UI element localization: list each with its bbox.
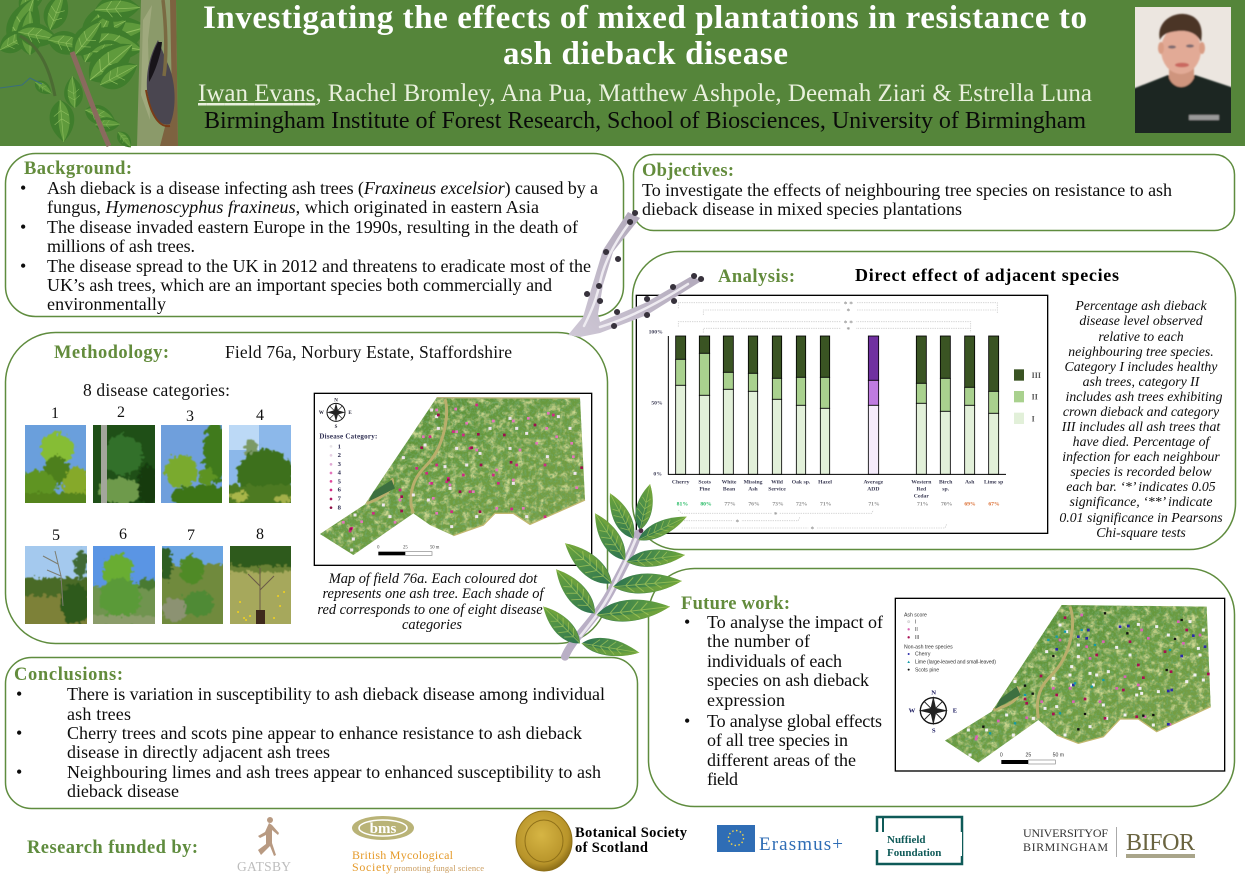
- map compass: [319, 399, 352, 430]
- logo: University of Birmingham and BIFoR: BIRMINGHAM: [1023, 840, 1108, 854]
- background bullet list: The disease spread to the UK in 2012 and threatens to eradicate most of the: [47, 256, 591, 276]
- significance brackets bottom: *: [735, 517, 739, 526]
- bars: [676, 336, 999, 474]
- chart explanation text: infection for each neighbour: [1062, 449, 1220, 464]
- future work bullet list: expression: [707, 690, 785, 710]
- photo 2: [93, 425, 155, 503]
- map legend: Scots pine: [915, 667, 939, 673]
- chart explanation text: neighbouring tree species.: [1068, 344, 1214, 359]
- logo: Botanical Society of Scotland: Botanical Society: [575, 825, 688, 841]
- map compass: S: [932, 727, 936, 734]
- map: ash score and non-ash species: [895, 598, 1225, 771]
- title: [203, 0, 1087, 72]
- map aerial image: [320, 398, 585, 555]
- background bullet list: •: [20, 178, 26, 198]
- photo 5: [25, 546, 87, 624]
- species labels: Bean: [723, 487, 736, 493]
- significance brackets top: [678, 299, 997, 334]
- future work bullet list: of all tree species in: [707, 730, 848, 750]
- species labels: Service: [768, 487, 786, 493]
- conclusions bullet list: ash trees: [67, 704, 131, 724]
- panel: conclusions: [6, 658, 638, 808]
- map legend: I: [915, 619, 916, 625]
- panel: future work: [648, 568, 1234, 806]
- map compass: N: [931, 689, 936, 696]
- infection percentages: 73%: [772, 502, 784, 508]
- panel: objectives: [634, 154, 1234, 230]
- authors: Iwan Evans, Rachel Bromley, Ana Pua, Matthew Ashpole, Deemah Ziari & Estrella Luna: [198, 80, 1092, 107]
- logo: Nuffield Foundation: [877, 817, 962, 864]
- map caption: Map of field 76a. Each coloured dot: [328, 571, 538, 587]
- chart explanation text: relative to each: [1098, 329, 1184, 344]
- infection percentages: 70%: [941, 502, 953, 508]
- species labels: Lime sp: [984, 480, 1003, 486]
- conclusions bullet list: dieback disease: [67, 781, 179, 801]
- chart explanation text: disease level observed: [1079, 313, 1203, 328]
- chart explanation text: significance, ‘**’ indicate: [1070, 494, 1212, 509]
- y axis labels: 0%: [653, 471, 662, 477]
- background bullet list: •: [20, 256, 26, 276]
- author portrait photo: [1135, 7, 1231, 133]
- species labels: Ash: [965, 480, 975, 486]
- map caption: red corresponds to one of eight disease: [317, 602, 543, 618]
- objectives text: [642, 180, 1172, 219]
- species labels: sp.: [942, 487, 950, 493]
- map compass: E: [953, 708, 958, 715]
- map compass: W: [909, 708, 916, 715]
- conclusions bullet list: Neighbouring limes and ash trees appear to enhanced susceptibility to ash: [67, 762, 601, 782]
- chart title: Direct effect of adjacent species: [855, 265, 1119, 285]
- heading: background: Background:: [24, 159, 132, 179]
- map legend: [904, 612, 996, 673]
- map legend: Ash score: [904, 612, 927, 618]
- photo 1: [25, 425, 86, 503]
- chart explanation text: [1059, 298, 1223, 540]
- chart explanation text: species is recorded below: [1070, 464, 1212, 479]
- species labels: Red: [916, 487, 927, 493]
- map scale bar: 25: [403, 545, 408, 550]
- chart explanation text: ash trees, category II: [1083, 374, 1201, 389]
- species labels: Birch: [939, 480, 953, 486]
- map legend: III: [915, 635, 919, 641]
- significance brackets bottom: [678, 510, 947, 534]
- header banner: [0, 0, 1245, 151]
- chart legend: II: [1032, 393, 1038, 402]
- category numbers: 3: [186, 408, 194, 425]
- objectives text: To investigate the effects of neighbouring tree species on resistance to ash: [642, 180, 1172, 200]
- infection percentages: 71%: [917, 502, 929, 508]
- photo 4: [229, 425, 291, 503]
- category numbers: 8: [256, 526, 264, 543]
- infection percentages: 76%: [748, 502, 760, 508]
- chart explanation text: Category I includes healthy: [1065, 359, 1218, 374]
- map legend: 4: [338, 470, 342, 477]
- species labels: Oak sp.: [792, 480, 811, 486]
- future work bullet list: To analyse the impact of: [707, 612, 883, 632]
- field location: Field 76a, Norbury Estate, Staffordshire: [225, 342, 512, 362]
- map dots: [343, 405, 582, 550]
- infection percentages: 71%: [868, 502, 880, 508]
- map: field 76a disease categories: [314, 393, 592, 565]
- map scale bar: [377, 545, 440, 555]
- logo: University of Birmingham and BIFoR: BIFOR: [1126, 830, 1195, 856]
- conclusions bullet list: •: [16, 762, 22, 782]
- logo: Gatsby: [237, 817, 291, 874]
- chart legend: [1014, 369, 1041, 424]
- y axis labels: 50%: [651, 400, 663, 406]
- map aerial image: [945, 605, 1211, 763]
- y axis labels: 100%: [649, 329, 663, 335]
- stacked bar chart: direct effect of adjacent species: [636, 295, 1048, 534]
- future work bullet list: [684, 612, 883, 789]
- species labels: Hazel: [818, 480, 832, 486]
- future work bullet list: To analyse global effects: [707, 711, 882, 731]
- future work bullet list: different areas of the: [707, 750, 856, 770]
- map caption: represents one ash tree. Each shade of: [322, 586, 546, 602]
- background bullet list: •: [20, 217, 26, 237]
- infection percentages: 71%: [820, 502, 832, 508]
- conclusions bullet list: •: [16, 723, 22, 743]
- map compass: E: [348, 411, 352, 416]
- infection percentages: 80%: [700, 502, 712, 508]
- species labels: Average: [863, 480, 884, 486]
- map scale bar: 50 m: [430, 545, 440, 550]
- map legend: 5: [338, 478, 342, 485]
- future work bullet list: field: [707, 769, 738, 789]
- future work bullet list: •: [684, 711, 690, 731]
- map legend: 2: [338, 452, 342, 459]
- heading: research funded by: Research funded by:: [27, 838, 198, 858]
- category numbers: 2: [117, 404, 125, 421]
- conclusions bullet list: •: [16, 684, 22, 704]
- photo 3: [161, 425, 222, 503]
- map compass: N: [334, 399, 338, 404]
- species labels: ADD: [867, 487, 879, 493]
- logo: British Mycological Society: promoting fungal science: [394, 863, 484, 873]
- map legend: 8: [338, 504, 342, 511]
- future work bullet list: •: [684, 612, 690, 632]
- map legend: Cherry: [915, 652, 931, 658]
- chart explanation text: each bar. ‘*’ indicates 0.05: [1066, 479, 1216, 494]
- chart explanation text: 0.01 significance in Pearsons: [1059, 510, 1223, 525]
- future work bullet list: individuals of each: [707, 651, 842, 671]
- logo: British Mycological Society: British Mycological: [352, 848, 454, 862]
- map legend: 3: [338, 461, 342, 468]
- header image: ash foliage and cankered trunk: [0, 0, 178, 151]
- category numbers: 4: [256, 407, 264, 424]
- disease category photo grid: [17, 404, 296, 628]
- logo: Nuffield Foundation: Foundation: [887, 847, 941, 859]
- panel: analysis: [632, 252, 1236, 550]
- map legend: Non-ash tree species: [904, 644, 953, 650]
- background bullet list: [20, 178, 598, 314]
- photo 7: [162, 546, 223, 624]
- logo: British Mycological Society: Society: [352, 860, 392, 874]
- map scale bar: 50 m: [1053, 753, 1064, 759]
- chart explanation text: includes ash trees exhibiting: [1066, 389, 1223, 404]
- significance brackets top: * *: [844, 318, 853, 327]
- photo 6: [93, 546, 155, 624]
- heading: future work: Future work:: [681, 594, 790, 614]
- chart explanation text: have died. Percentage of: [1073, 434, 1211, 449]
- species labels: Scots: [698, 480, 712, 486]
- logo: British Mycological Society: [352, 816, 484, 874]
- heading: objectives: Objectives:: [642, 161, 734, 181]
- chart explanation text: III includes all ash trees that: [1061, 419, 1221, 434]
- chart explanation text: Chi-square tests: [1096, 525, 1186, 540]
- logo: Erasmus+: [717, 825, 843, 855]
- logo: Erasmus+: Erasmus+: [759, 834, 843, 855]
- significance brackets bottom: *: [774, 510, 778, 519]
- disease categories heading: 8 disease categories:: [83, 380, 230, 400]
- map scale bar: 0: [377, 545, 380, 550]
- map legend: 6: [338, 487, 342, 494]
- species labels: [672, 480, 1003, 500]
- map legend: 7: [338, 496, 342, 503]
- species labels: Ash: [748, 487, 759, 493]
- map scale bar: 25: [1025, 753, 1031, 759]
- future work bullet list: species on ash dieback: [707, 670, 869, 690]
- background bullet list: fungus, Hymenoscyphus fraxineus, which originated in eastern Asia: [47, 197, 539, 217]
- species labels: Cherry: [672, 480, 690, 486]
- infection percentages: 69%: [964, 502, 976, 508]
- chart legend: I: [1032, 414, 1035, 423]
- background bullet list: environmentally: [47, 294, 166, 314]
- species labels: Missing: [744, 480, 763, 486]
- panel: methodology: [6, 332, 608, 644]
- background bullet list: UK’s ash trees, which are an important species both commercially and: [47, 275, 552, 295]
- map scale bar: [1000, 753, 1064, 764]
- icon: ash twig with buds: [568, 212, 703, 337]
- significance brackets bottom: *: [810, 525, 814, 534]
- map compass: W: [319, 411, 324, 416]
- map legend: 1: [338, 443, 341, 450]
- significance brackets top: * *: [844, 299, 853, 308]
- species labels: Western: [911, 480, 932, 486]
- chart explanation text: Percentage ash dieback: [1074, 298, 1208, 313]
- photo 8: [230, 546, 291, 624]
- logo: Gatsby: GATSBY: [237, 859, 291, 874]
- map legend: II: [915, 627, 918, 633]
- heading: methodology: Methodology:: [54, 343, 169, 363]
- background bullet list: millions of ash trees.: [47, 236, 195, 256]
- logo: University of Birmingham and BIFoR: UNIVERSITYOF: [1023, 826, 1108, 840]
- logo: Botanical Society of Scotland: [516, 811, 688, 871]
- significance brackets top: *: [846, 307, 850, 316]
- conclusions bullet list: [16, 684, 605, 801]
- conclusions bullet list: disease in directly adjacent ash trees: [67, 742, 330, 762]
- species labels: Pine: [699, 487, 710, 493]
- map legend: Disease Category:: [319, 433, 377, 441]
- logo: Nuffield Foundation: Nuffield: [887, 834, 926, 846]
- affiliation: Birmingham Institute of Forest Research, School of Biosciences, University of Birmingham: [204, 108, 1086, 134]
- heading: conclusions: Conclusions:: [14, 665, 123, 685]
- title: Investigating the effects of mixed plantations in resistance to: [203, 0, 1087, 36]
- footer: funders: [27, 811, 1195, 874]
- chart legend: III: [1032, 371, 1041, 380]
- map caption: categories: [402, 617, 462, 633]
- infection percentages: 67%: [988, 502, 1000, 508]
- title: ash dieback disease: [503, 36, 788, 72]
- category numbers: [51, 404, 264, 544]
- map caption: [317, 571, 546, 633]
- category numbers: 7: [187, 527, 195, 544]
- heading: analysis: Analysis:: [718, 267, 795, 287]
- map compass: S: [335, 425, 338, 430]
- category numbers: 5: [52, 527, 60, 544]
- infection percentages: [677, 502, 1000, 508]
- conclusions bullet list: Cherry trees and scots pine appear to enhance resistance to ash dieback: [67, 723, 582, 743]
- icon: ash leaf sprig: [537, 482, 690, 660]
- species labels: White: [722, 480, 737, 486]
- map legend: [319, 433, 377, 511]
- category numbers: 1: [51, 405, 59, 422]
- background bullet list: The disease invaded eastern Europe in the 1990s, resulting in the death of: [47, 217, 578, 237]
- infection percentages: 72%: [796, 502, 808, 508]
- map compass: [909, 689, 958, 734]
- map legend: Lime (large-leaved and small-leaved): [915, 660, 996, 666]
- infection percentages: 81%: [677, 502, 688, 508]
- conclusions bullet list: There is variation in susceptibility to ash dieback disease among individual: [67, 684, 605, 704]
- infection percentages: 77%: [724, 502, 736, 508]
- background bullet list: Ash dieback is a disease infecting ash trees (Fraxineus excelsior) caused by a: [47, 178, 598, 199]
- logo: Botanical Society of Scotland: of Scotland: [575, 840, 648, 856]
- objectives text: dieback disease in mixed species plantations: [642, 199, 962, 219]
- panel: background: [6, 154, 624, 316]
- future work bullet list: the number of: [707, 631, 810, 651]
- logo: University of Birmingham and BIFoR: [1023, 826, 1195, 858]
- logo: British Mycological Society: bms: [370, 821, 396, 837]
- species labels: Cedar: [914, 494, 929, 500]
- species labels: Wild: [771, 480, 784, 486]
- significance brackets top: *: [846, 325, 850, 334]
- map dots: [968, 613, 1208, 755]
- chart explanation text: crown dieback and category: [1063, 404, 1220, 419]
- y axis labels: [649, 329, 663, 477]
- map scale bar: 0: [1000, 753, 1003, 759]
- category numbers: 6: [119, 526, 127, 543]
